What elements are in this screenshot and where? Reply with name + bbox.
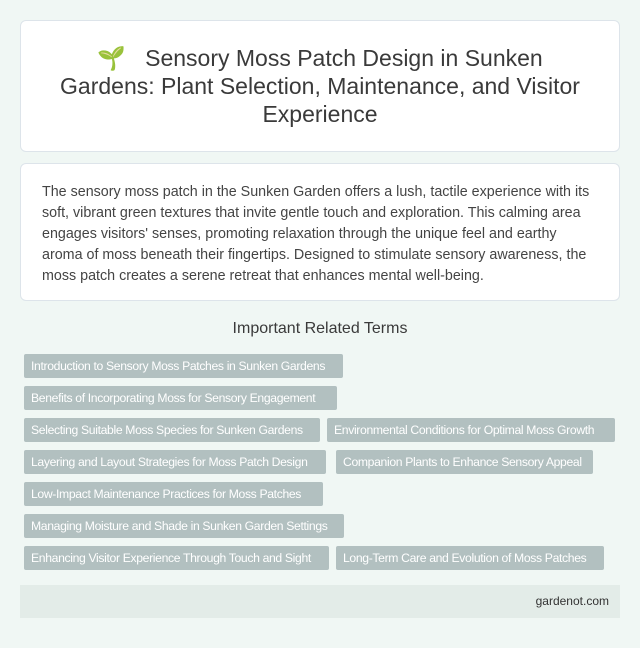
tags: Long-Term Care and Evolution of Moss Patches — [343, 551, 586, 565]
tags: Enhancing Visitor Experience Through Touch and Sight — [31, 551, 311, 565]
tags: Low-Impact Maintenance Practices for Moss Patches — [31, 487, 301, 501]
title: 🌱 Sensory Moss Patch Design in Sunken — [97, 45, 543, 71]
tags: Benefits of Incorporating Moss for Sensory Engagement — [31, 391, 315, 405]
title: Gardens: Plant Selection, Maintenance, and Visitor — [60, 73, 580, 99]
title — [20, 20, 620, 152]
tags: Managing Moisture and Shade in Sunken Garden Settings — [31, 519, 328, 533]
heading: related terms: Important Related Terms — [233, 320, 407, 337]
tags — [24, 354, 615, 570]
description: aroma of moss beneath their fingertips. Designed to stimulate sensory awareness, the — [42, 247, 586, 263]
footer — [20, 585, 620, 618]
description: The sensory moss patch in the Sunken Garden offers a lush, tactile experience with its — [42, 184, 589, 200]
description — [20, 163, 620, 301]
tags: Selecting Suitable Moss Species for Sunken Gardens — [31, 423, 303, 437]
tags: Introduction to Sensory Moss Patches in Sunken Gardens — [31, 359, 325, 373]
description: soft, vibrant green textures that invite gentle touch and exploration. This calming area — [42, 205, 581, 221]
description: moss patch creates a serene retreat that enhances mental well-being. — [42, 268, 484, 284]
tags: Layering and Layout Strategies for Moss Patch Design — [31, 455, 308, 469]
description: engages visitors' senses, promoting relaxation through the unique feel and earthy — [42, 226, 557, 242]
footer: gardenot.com — [536, 594, 609, 608]
tags: Environmental Conditions for Optimal Moss Growth — [334, 423, 594, 437]
tags: Companion Plants to Enhance Sensory Appeal — [343, 455, 582, 469]
title: Experience — [262, 101, 378, 127]
